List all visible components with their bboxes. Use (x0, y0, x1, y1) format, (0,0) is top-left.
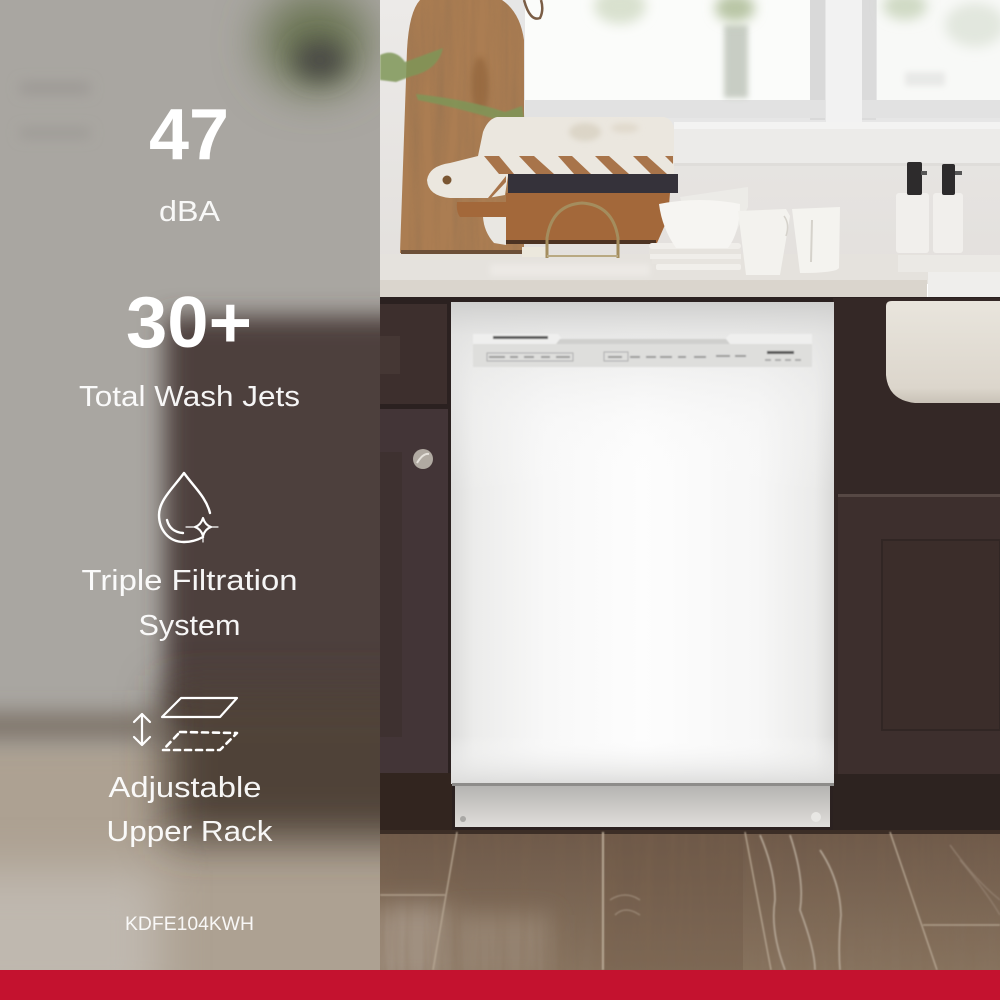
herb sprig (380, 48, 524, 122)
wall (380, 0, 1000, 270)
mugs (738, 207, 840, 275)
acacia board (457, 193, 670, 244)
control panel (473, 334, 812, 367)
slate board (508, 174, 678, 193)
toe kick (452, 783, 834, 827)
red footer bar (0, 970, 1000, 1000)
inlaid stripes (484, 156, 673, 198)
countertop (380, 254, 1000, 300)
stat: 47 dBA (149, 95, 229, 228)
label: triple filtration system: System (138, 610, 240, 642)
window frame (674, 0, 1000, 129)
farmhouse sink (886, 301, 1000, 403)
stat: 47 dBA: dBA (159, 196, 221, 228)
stat: 47 dBA: 47 (149, 95, 229, 175)
left cabinet (380, 304, 448, 773)
icon: water drop with sparkle (159, 473, 218, 542)
label: triple filtration system (82, 565, 298, 642)
marble board (427, 117, 674, 245)
kitchen photo (370, 0, 1000, 985)
stat: 30+ total wash jets (79, 283, 300, 413)
dishwasher door (451, 302, 834, 784)
right cabinet (833, 298, 1000, 774)
plates (649, 243, 741, 270)
bowls (659, 191, 748, 243)
brass rack handle (522, 203, 618, 258)
panel: blurred left sidebar (0, 0, 380, 970)
cabinet backing (380, 297, 1000, 832)
model number: KDFE104KWH (125, 914, 254, 935)
label: triple filtration system: Triple Filtration (82, 565, 298, 597)
icon: adjustable rack (134, 698, 237, 750)
window glass and garden view (525, 0, 1000, 120)
label: adjustable upper rack: Upper Rack (106, 816, 273, 848)
wood floor (380, 830, 1000, 970)
wooden cutting board (400, 0, 544, 254)
soap dispensers (896, 162, 963, 253)
stat: 30+ total wash jets: Total Wash Jets (79, 381, 300, 413)
stat: 30+ total wash jets: 30+ (126, 283, 252, 363)
cabinet knob (413, 449, 433, 469)
label: adjustable upper rack: Adjustable (108, 772, 262, 804)
label: adjustable upper rack (106, 772, 273, 848)
